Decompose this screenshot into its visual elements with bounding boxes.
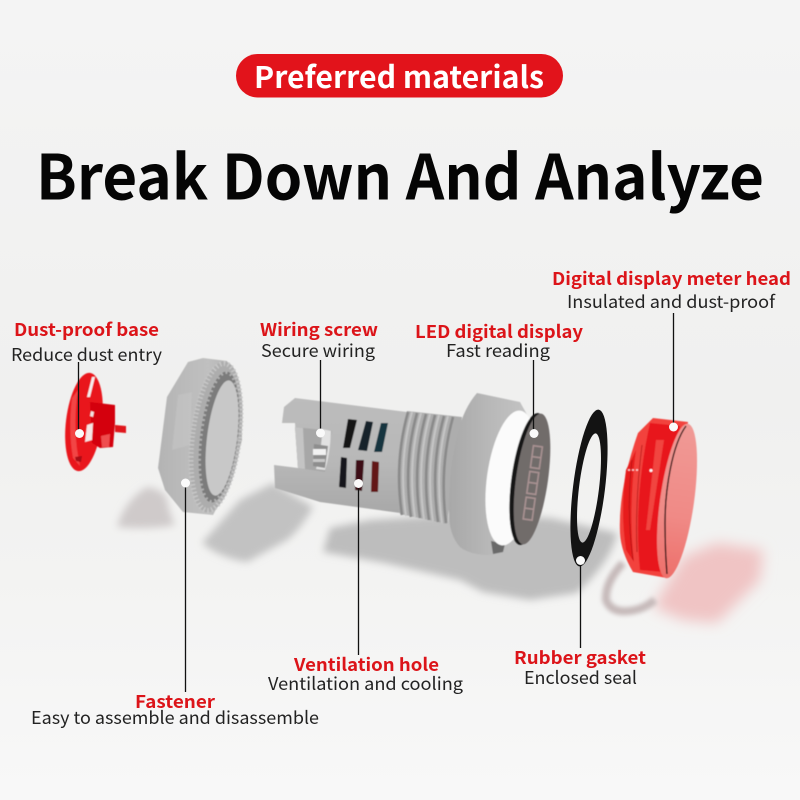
label: LED digital display: Fast reading — [446, 338, 550, 363]
label: dust-proof base: Reduce dust entry — [11, 342, 162, 367]
marker dots — [75, 422, 678, 565]
wiring screw — [313, 429, 331, 470]
part: dust-proof base — [60, 371, 126, 473]
part: display meter head — [620, 418, 705, 581]
shadow: meter body — [323, 515, 617, 600]
label: LED digital display: LED digital display — [415, 319, 583, 344]
label: wiring screw — [260, 317, 378, 363]
label: dust-proof base: Dust-proof base — [14, 317, 159, 342]
label: digital display meter head: Insulated and dust-proof — [567, 289, 776, 314]
badge: preferred materials: Preferred materials — [254, 53, 544, 97]
leader lines — [78, 313, 674, 692]
shadow: dust-proof base — [117, 487, 175, 528]
label: digital display meter head — [552, 266, 791, 314]
label: LED digital display — [415, 319, 583, 363]
cast shadows — [117, 483, 763, 623]
shadow: meter head ring — [606, 563, 655, 611]
title: Break Down And Analyze — [36, 128, 764, 218]
shadow: meter head tint — [653, 543, 763, 623]
thread — [398, 411, 462, 524]
label: fastener: Easy to assemble and disassemble — [31, 705, 319, 730]
label: fastener: Fastener — [135, 689, 215, 714]
label: rubber gasket — [514, 645, 647, 690]
label: ventilation hole — [268, 652, 463, 696]
label: ventilation hole: Ventilation and cooling — [268, 671, 463, 696]
label: fastener — [31, 689, 319, 730]
ventilation slots — [339, 419, 388, 492]
LED display face — [502, 411, 557, 547]
part: meter body — [274, 393, 557, 555]
label: digital display meter head: Digital display meter head — [552, 266, 791, 291]
shadow: fastener — [202, 483, 313, 562]
label: ventilation hole: Ventilation hole — [293, 652, 439, 677]
flange — [449, 393, 530, 555]
label: rubber gasket: Enclosed seal — [524, 665, 637, 690]
label: wiring screw: Secure wiring — [261, 338, 375, 363]
part: fastener — [158, 358, 250, 515]
white insulation ring — [478, 407, 544, 549]
label: dust-proof base — [11, 317, 162, 367]
label: rubber gasket: Rubber gasket — [514, 645, 647, 670]
part: rubber gasket — [563, 408, 615, 568]
label: wiring screw: Wiring screw — [260, 317, 378, 342]
notch — [295, 427, 332, 472]
